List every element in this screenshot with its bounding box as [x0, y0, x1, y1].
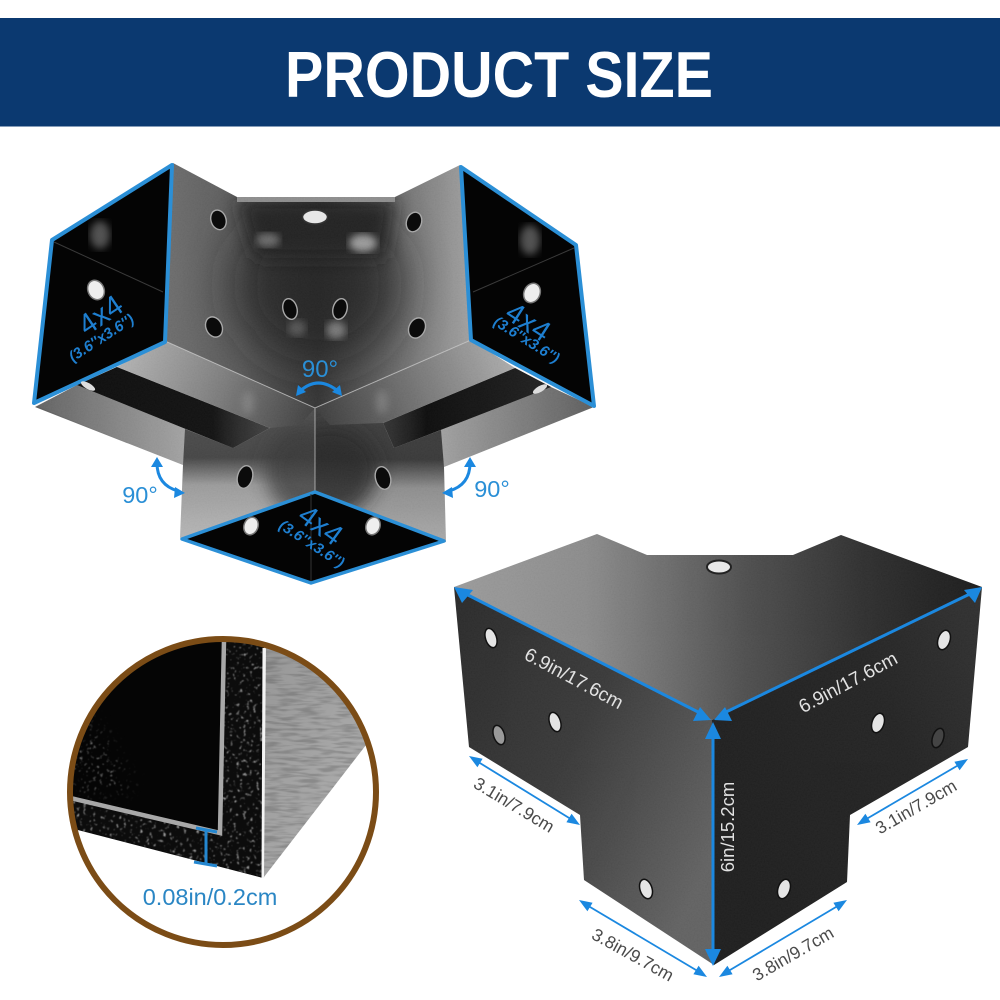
dimension labels on metal: 6.9in/17.6cm [795, 648, 901, 718]
grain [42, 173, 590, 506]
stray slot glints [80, 379, 548, 396]
upper plate [165, 163, 471, 408]
left face [454, 587, 714, 965]
socket label: (3.6''x3.6'') [276, 517, 347, 572]
angle: right [442, 457, 510, 502]
left socket [34, 165, 172, 403]
dimension arrow: height [705, 722, 721, 966]
thickness label: 0.08in/0.2cm [143, 884, 277, 910]
angle: centre: 90° [302, 356, 338, 383]
lower right wall [394, 387, 594, 467]
face holes [483, 627, 953, 900]
grain [450, 530, 985, 970]
socket label: (3.6''x3.6'') [66, 311, 137, 366]
rough edge band [78, 829, 262, 878]
socket label: (3.6''x3.6'') [490, 313, 562, 367]
top screw hole [302, 210, 328, 224]
centre stem right [315, 408, 446, 542]
angle: left [122, 457, 185, 508]
inner panel grit [73, 715, 138, 800]
magnified corner [73, 642, 366, 878]
title: PRODUCT SIZE [285, 38, 713, 111]
angle: right: 90° [474, 476, 510, 502]
lower left wall [35, 385, 233, 465]
socket label: 4x4 [500, 296, 556, 349]
hole [241, 515, 261, 537]
dimension labels on white: 3.1in/7.9cm [872, 776, 960, 838]
dimension arrow: top right edge [714, 587, 982, 721]
right face [712, 587, 982, 965]
left rim [117, 341, 315, 428]
dimension arrow: top left edge [454, 587, 711, 721]
angle: centre [296, 356, 342, 396]
angle: left: 90° [122, 482, 158, 508]
magnifier: material thickness detail [67, 636, 379, 948]
hole [85, 278, 107, 302]
left slot [77, 367, 270, 448]
dimension labels on metal: 6.9in/17.6cm [521, 644, 627, 714]
magnifier ring [70, 639, 376, 945]
light inner edge [70, 640, 224, 833]
rim glints [242, 390, 388, 415]
hole [521, 281, 543, 305]
bracket: outside view with dimensions [450, 530, 985, 985]
bracket: inside view with 4x4 sockets [30, 160, 600, 585]
90 degree angle annotations [122, 356, 510, 508]
dimension labels on white: 3.1in/7.9cm [470, 773, 558, 837]
dimension labels on metal [521, 644, 901, 872]
hole [363, 515, 383, 537]
socket label: 4x4 [292, 499, 349, 552]
dimension arrows: arm and stem widths [469, 756, 968, 977]
dimension labels on metal: 6in/15.2cm [717, 782, 738, 872]
header banner [0, 18, 1000, 126]
dimension labels on white [470, 773, 960, 985]
bolt holes [202, 208, 429, 491]
top hole [707, 560, 731, 574]
dimension labels on white: 3.8in/9.7cm [588, 924, 677, 985]
socket label: 4x4 [73, 289, 129, 342]
right slot [383, 368, 551, 448]
lit side face [264, 648, 366, 877]
centre stem left [180, 408, 315, 538]
ridge lines [165, 340, 471, 492]
top plate [454, 534, 982, 720]
bottom socket [182, 492, 444, 583]
right socket [461, 167, 594, 406]
thickness marker [194, 828, 217, 866]
dimension labels on white: 3.8in/9.7cm [749, 923, 837, 985]
right rim [315, 340, 515, 425]
white edge line [263, 648, 264, 878]
